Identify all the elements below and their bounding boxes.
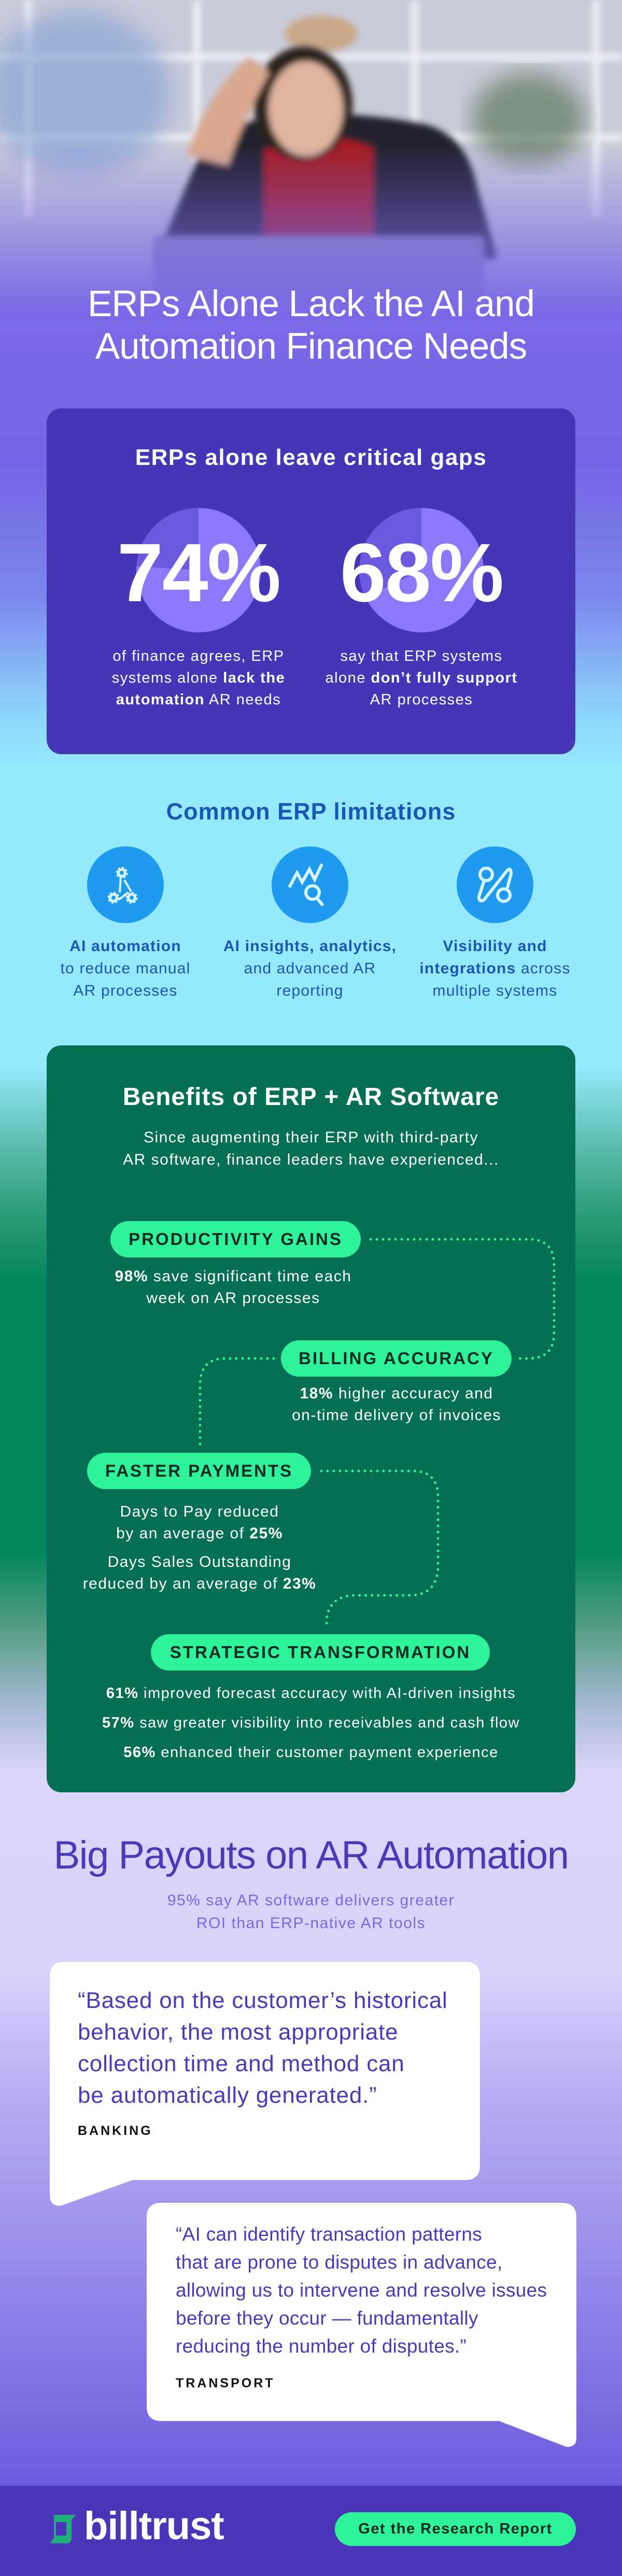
benefits intro [123, 1129, 499, 1168]
benefits intro: Since augmenting their ERP with third-party [144, 1129, 478, 1146]
label [223, 938, 397, 999]
limitation: AI automation [60, 846, 191, 999]
label: multiple systems [433, 982, 557, 999]
text: billing [292, 1385, 501, 1424]
button: get the report [335, 2512, 576, 2546]
title: ERPs Alone Lack the AI and [88, 284, 534, 324]
quote: transport: before they occur — fundamentally [176, 2308, 478, 2329]
dotted connector path [199, 1238, 556, 1624]
pie chart 68% [359, 508, 484, 632]
panel: critical gaps: AR processes [370, 691, 473, 708]
label: AI automation [69, 938, 181, 955]
heading: common ERP limitations: Common ERP limitations [166, 798, 456, 825]
stat: 74%: of finance agrees, ERP systems alone lack the automation AR needs [112, 648, 285, 708]
icon: chart search [272, 846, 348, 923]
stat: 68%: say that ERP systems [340, 648, 503, 664]
quote: banking: BANKING [78, 2124, 153, 2138]
text: strategic [102, 1685, 520, 1761]
stat: 68% [325, 508, 518, 708]
text: productivity: week on AR processes [146, 1290, 320, 1307]
text: productivity [115, 1268, 351, 1307]
text: billing: on-time delivery of invoices [292, 1407, 501, 1424]
panel: critical gaps [47, 408, 575, 754]
label: integrations across [419, 960, 571, 977]
label [419, 938, 571, 999]
text: DSO: Days Sales Outstanding [108, 1553, 291, 1570]
panel: benefits [47, 1045, 575, 1792]
stat: 74%: 74% [117, 526, 280, 619]
icon: integrations [457, 846, 533, 923]
label [60, 938, 191, 999]
stat: 74% [112, 508, 285, 708]
quote: banking: behavior, the most appropriate [78, 2019, 398, 2045]
text: strategic: 57% saw greater visibility into receivables and cash flow [102, 1715, 520, 1731]
pill: faster payments [87, 1453, 311, 1489]
text: DSO [83, 1553, 316, 1592]
title [88, 284, 534, 367]
title: Automation Finance Needs [95, 326, 527, 367]
text: productivity: 98% save significant time each [115, 1268, 351, 1285]
pill: strategic transformation [151, 1634, 490, 1671]
text: DSO: reduced by an average of 23% [83, 1575, 316, 1592]
panel heading: ERPs alone leave critical gaps [135, 445, 487, 470]
pill: productivity gains: PRODUCTIVITY GAINS [129, 1229, 343, 1249]
quote: transport: reducing the number of disputes.” [176, 2336, 466, 2357]
label: AI insights, analytics, [223, 938, 397, 955]
subheading: 95%: 95% say AR software delivers greater [167, 1892, 455, 1909]
text: faster payments: by an average of 25% [116, 1525, 283, 1542]
quote: transport: TRANSPORT [176, 2376, 275, 2390]
pill: strategic transformation: STRATEGIC TRANSFORMATION [170, 1643, 471, 1662]
subheading: 95%: ROI than ERP-native AR tools [196, 1915, 426, 1932]
label: reporting [276, 982, 344, 999]
text: strategic: 61% improved forecast accuracy with AI-driven insights [106, 1685, 516, 1702]
label: AR processes [73, 982, 178, 999]
pill: productivity gains [110, 1221, 361, 1257]
quote: banking [50, 1962, 480, 2206]
text: faster payments: Days to Pay reduced [120, 1503, 279, 1520]
label: and advanced AR [244, 960, 376, 977]
quote: banking: “Based on the customer’s historical [78, 1988, 448, 2013]
stat: 68%: alone don’t fully support [325, 670, 518, 686]
icon: gears [87, 846, 164, 923]
quote: banking: be automatically generated.” [78, 2083, 377, 2108]
text: faster payments [116, 1503, 283, 1542]
limitation: visibility [419, 846, 571, 999]
subheading: 95% [167, 1892, 455, 1932]
benefits heading: Benefits of ERP + AR Software [123, 1083, 499, 1111]
pie chart 74% [136, 508, 261, 632]
heading: big payouts: Big Payouts on AR Automation [53, 1833, 569, 1877]
logo: billtrust [84, 2504, 224, 2548]
footer [0, 2486, 622, 2576]
benefits intro: AR software, finance leaders have experienced... [123, 1151, 499, 1168]
quote: transport: “AI can identify transaction patterns [176, 2224, 482, 2245]
label: Visibility and [443, 938, 547, 955]
limitation: AI insights [223, 846, 397, 999]
quote: transport: allowing us to intervene and resolve issues [176, 2280, 547, 2301]
pill: billing accuracy: BILLING ACCURACY [299, 1349, 494, 1368]
text: strategic: 56% enhanced their customer payment experience [123, 1744, 499, 1761]
text: billing: 18% higher accuracy and [300, 1385, 493, 1402]
pill: faster payments: FASTER PAYMENTS [105, 1461, 293, 1480]
stat: 68%: 68% [340, 526, 503, 619]
quote: transport: that are prone to disputes in advance, [176, 2252, 503, 2273]
hero photo [0, 0, 622, 285]
button: get the report: Get the Research Report [358, 2521, 553, 2537]
quote: banking: collection time and method can [78, 2051, 405, 2076]
pill: billing accuracy [281, 1340, 512, 1377]
label: to reduce manual [60, 960, 191, 977]
quote: transport [147, 2203, 576, 2447]
